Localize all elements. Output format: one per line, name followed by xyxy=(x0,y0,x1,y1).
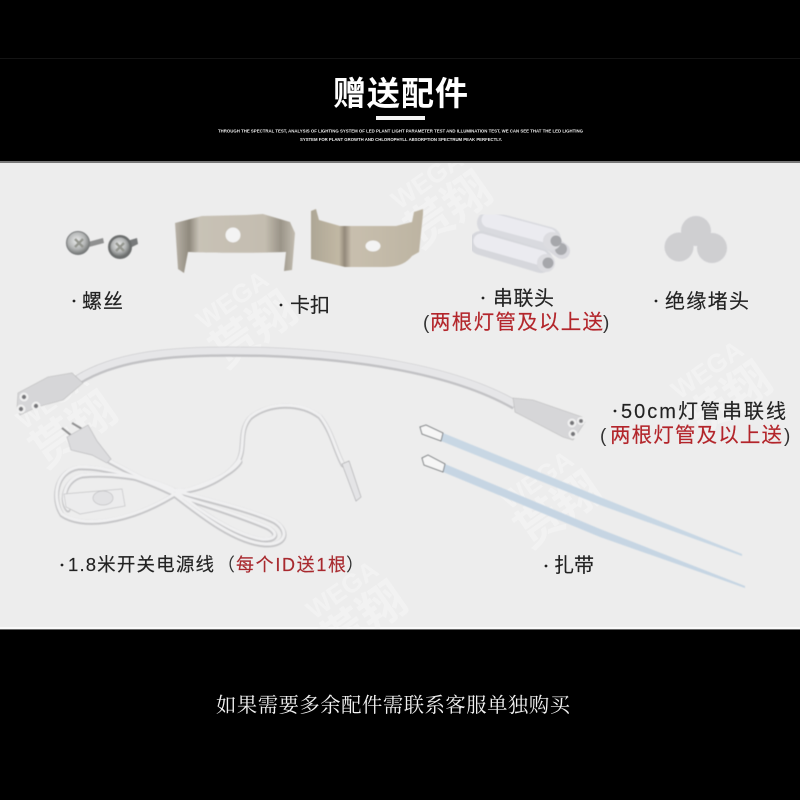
watermarks: 贳翔 xyxy=(311,572,416,668)
watermarks: 贳翔 xyxy=(396,162,501,258)
panel: accessories background xyxy=(0,161,800,630)
watermarks: 贳翔 xyxy=(506,462,611,558)
label: series connector: ( xyxy=(423,313,430,334)
watermarks: WEGA xyxy=(190,264,274,335)
watermarks: WEGA xyxy=(495,444,579,515)
label: end cap: 绝缘堵头 xyxy=(665,290,749,313)
icon: power cable with switch xyxy=(57,405,361,545)
icon: series connector xyxy=(481,220,567,272)
label: 50cm cable: ) xyxy=(784,426,790,447)
title underline xyxy=(376,116,425,120)
label: 50cm cable: ( xyxy=(600,426,607,447)
label: 50cm cable: 两根灯管及以上送 xyxy=(610,424,782,447)
label: series connector: 两根灯管及以上送 xyxy=(430,311,603,334)
title: 赠送配件 xyxy=(333,75,468,112)
label: cable ties: 扎带 xyxy=(554,554,594,577)
label: screws: 螺丝 xyxy=(82,290,123,313)
icon: 50cm lamp tube cable xyxy=(16,351,585,440)
watermarks: 贳翔 xyxy=(676,352,781,448)
icon: right clip xyxy=(311,209,423,267)
icon: left clip xyxy=(175,214,295,273)
watermarks: WEGA xyxy=(665,334,749,405)
watermarks: 贳翔 xyxy=(201,282,306,378)
subtitle text: THROUGH THE SPECTRAL TEST, ANALYSIS OF LIGHTING SYSTEM OF LED PLANT LIGHT PARAMETER TEST AND ILLUMINATION TEST, WE CAN SEE THAT THE LED LIGHTING xyxy=(218,128,584,134)
subtitle text xyxy=(218,128,584,142)
icon: cable ties xyxy=(420,425,745,588)
watermarks: WEGA xyxy=(385,144,469,215)
icon: insulating end cap xyxy=(664,216,727,263)
label: clip: 卡扣 xyxy=(290,294,330,317)
label: power cable xyxy=(61,554,364,575)
watermarks: WEGA xyxy=(10,364,94,435)
footer note: 如果需要多余配件需联系客服单独购买 xyxy=(216,694,571,717)
label: 50cm cable xyxy=(600,400,790,447)
label: power cable: 每个ID送1根 xyxy=(236,555,346,575)
subtitle text: SYSTEM FOR PLANT GROWTH AND CHLOROPHYLL ABSORPTION SPECTRUM PEAK PERFECTLY. xyxy=(300,137,502,142)
label: series connector xyxy=(423,287,609,334)
label: series connector: 串联头 xyxy=(493,287,554,310)
watermarks xyxy=(6,141,781,668)
label: power cable: ） xyxy=(346,555,364,575)
label: series connector: ) xyxy=(603,313,609,334)
label: power cable: 1.8米开关电源线 xyxy=(68,554,214,575)
watermarks: 贳翔 xyxy=(21,382,126,478)
icon: screws xyxy=(66,232,138,259)
label: power cable: （ xyxy=(217,555,235,575)
label: 50cm cable: 50cm灯管串联线 xyxy=(621,400,786,423)
watermarks: WEGA xyxy=(300,554,384,625)
